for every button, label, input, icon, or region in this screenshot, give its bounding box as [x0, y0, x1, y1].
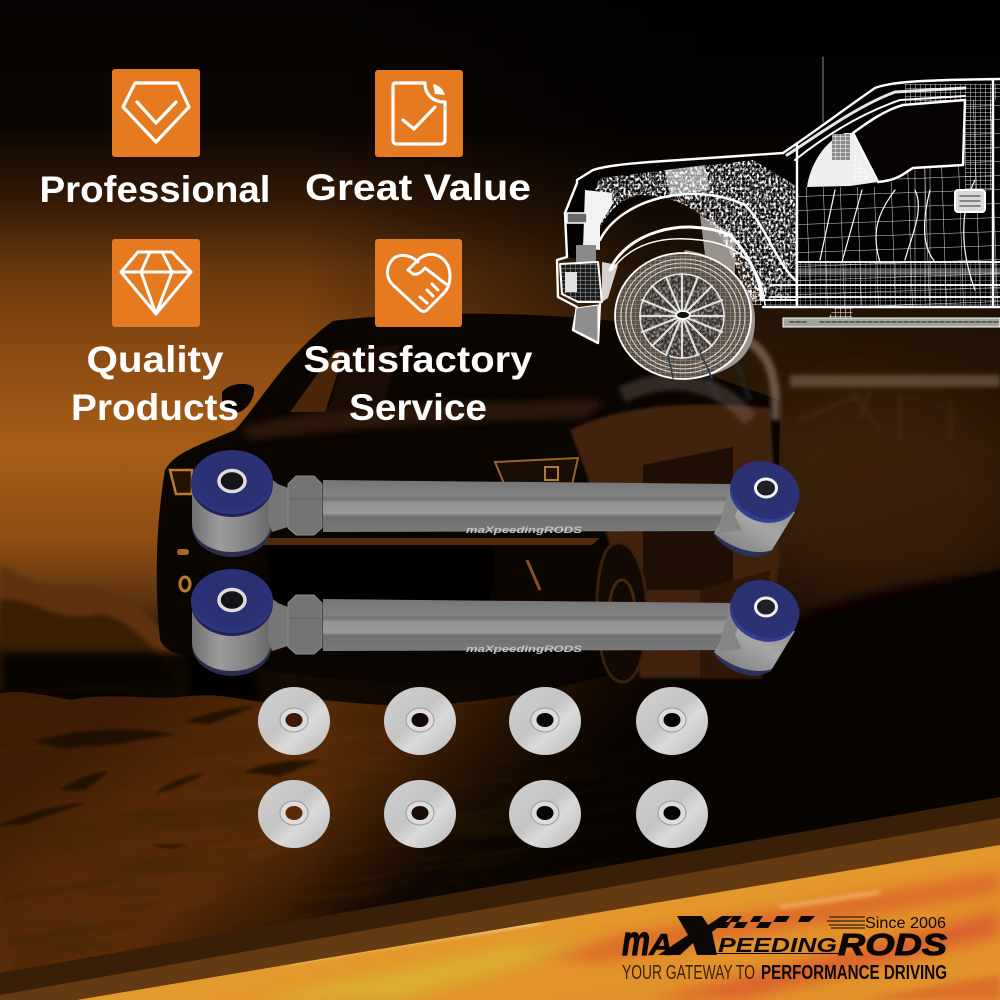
mesh on door [797, 100, 1000, 307]
car: windshield glass [290, 350, 345, 412]
left bushing [192, 614, 272, 676]
right dark slope [790, 572, 1000, 700]
car: front wheel [597, 543, 647, 682]
arm logo: maXpeedingRODS [466, 525, 582, 535]
car: grille band [262, 538, 600, 545]
icon: document check [375, 70, 463, 157]
panel: Satisfactory Service: Service [349, 387, 487, 428]
fender arches [600, 194, 795, 280]
logo: big X [658, 916, 733, 955]
arm tube [323, 480, 742, 532]
icon: diamond [112, 239, 200, 327]
panel: Quality Products: Products [71, 387, 239, 428]
logo: maXpeedingRODS: PEEDING [718, 935, 837, 957]
dense wire on hood and fender [582, 160, 797, 300]
logo: maXpeedingRODS: Since 2006 [865, 915, 946, 932]
right bushing [713, 652, 772, 676]
car: left headlight [170, 470, 192, 494]
heading: Satisfactory [304, 339, 533, 380]
mirror cluster [807, 133, 878, 187]
arm tube [323, 599, 742, 651]
outer outline [557, 79, 1000, 343]
car silhouette behind the arms [157, 314, 780, 682]
mountain: left ridge [0, 565, 190, 695]
logo: maXpeedingRODS [622, 915, 947, 984]
hardware: eight washers [258, 687, 708, 848]
panel: Great Value [305, 70, 531, 208]
arm logo: maXpeedingRODS [466, 644, 582, 654]
door curved lines [820, 180, 975, 290]
heading: Great Value [305, 167, 531, 208]
logo: checker flag [715, 916, 815, 928]
car: fog lights [177, 549, 189, 555]
icon: handshake heart [375, 239, 462, 327]
logo: maXpeedingRODS: RODS [838, 927, 947, 962]
icon: shield check [112, 69, 200, 157]
footer band: orange speed stripes [0, 797, 1000, 1000]
antenna [822, 57, 824, 122]
door handle [955, 190, 985, 212]
car: right headlight [495, 458, 578, 486]
body fill [565, 79, 1000, 307]
control arm: lower [191, 569, 808, 676]
front wheel [615, 250, 755, 379]
logo: speed lines [827, 917, 865, 928]
window [853, 100, 965, 182]
truck reflection under wireframe [622, 338, 1000, 440]
dark band above dunes [0, 652, 262, 702]
car: mirror [222, 384, 254, 414]
step bar [783, 318, 1000, 327]
heading: Professional [40, 169, 270, 210]
logo: maXpeedingRODS: A [648, 927, 673, 962]
panel: Satisfactory Service [304, 239, 533, 428]
car: hood highlight [240, 400, 605, 440]
car: lit flank [570, 404, 780, 678]
panel: Professional [40, 69, 270, 210]
logo: maXpeedingRODS: YOUR GATEWAY TO [622, 962, 755, 984]
logo: maXpeedingRODS: PERFORMANCE DRIVING [761, 962, 947, 984]
truck wireframe [557, 57, 1000, 379]
right bushing [713, 533, 772, 557]
panel: Quality Products [71, 239, 239, 428]
grille and headlight [583, 190, 612, 250]
heading: Quality [86, 339, 224, 380]
control arm: upper [191, 450, 808, 557]
dunes [0, 560, 1000, 1000]
left bushing [192, 495, 272, 557]
logo: maXpeedingRODS: m [622, 917, 650, 964]
dense mesh above and beside window [900, 84, 1000, 190]
